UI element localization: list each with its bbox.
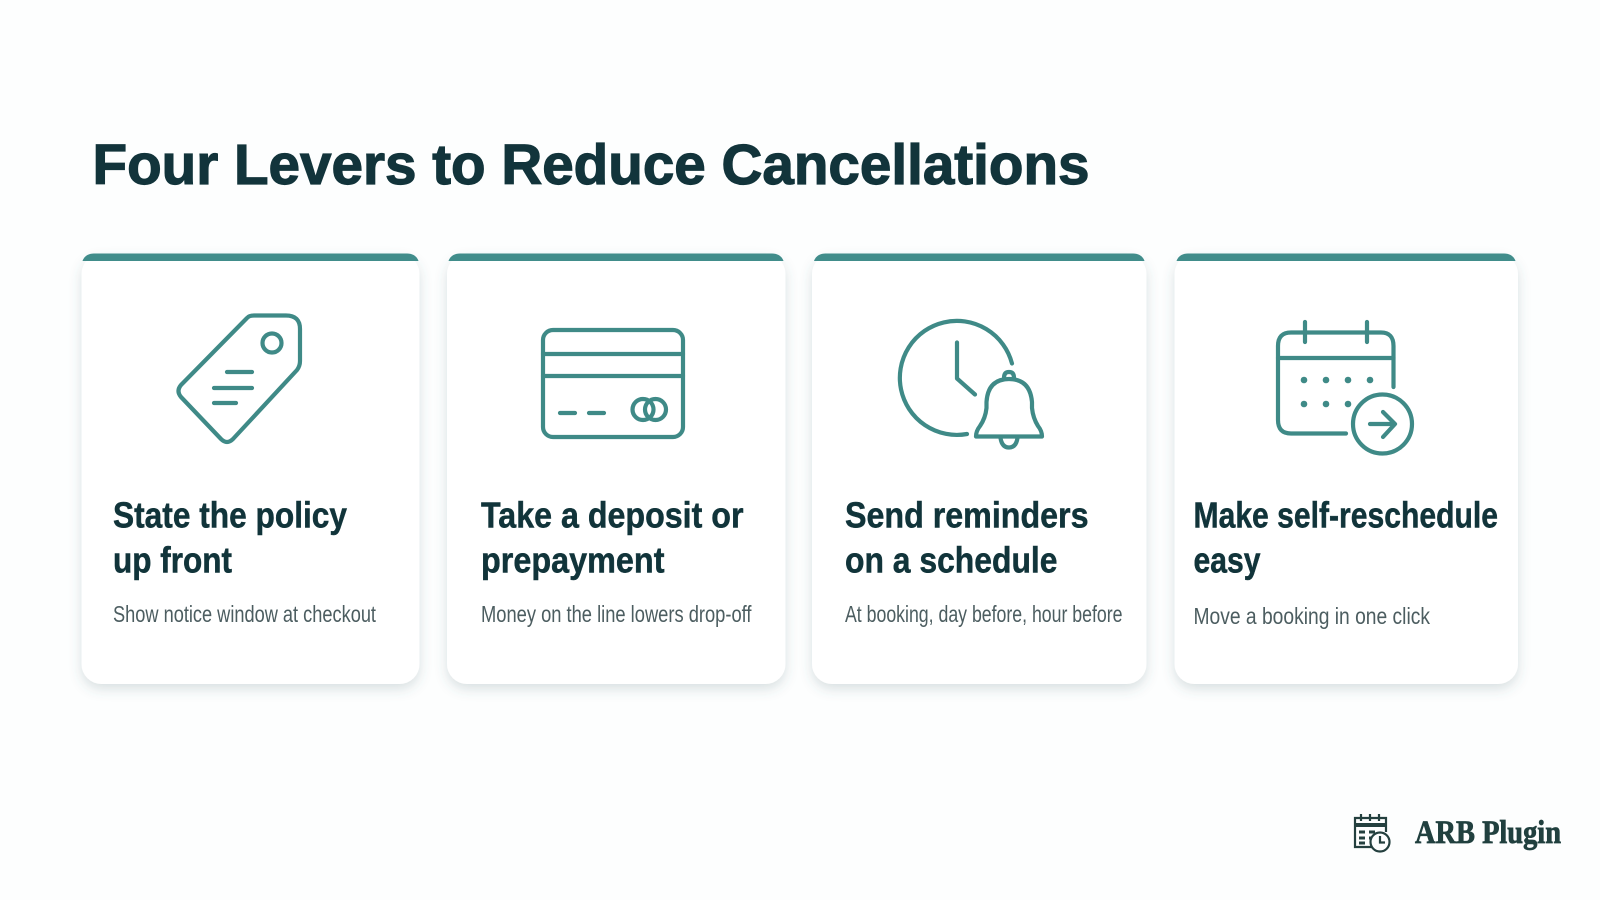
icon: logo calendar clock: [1355, 814, 1390, 852]
icon: calendar with arrow: [1278, 322, 1412, 454]
heading: Make self-reschedule: [1194, 494, 1498, 536]
panel: self-reschedule: [1174, 254, 1518, 684]
description: Move a booking in one click: [1194, 603, 1430, 629]
description: Show notice window at checkout: [113, 601, 376, 627]
icon dots: calendar days: [1301, 377, 1373, 407]
title: Four Levers to Reduce Cancellations: [92, 133, 1090, 197]
heading: prepayment: [481, 540, 664, 580]
logo: [1355, 814, 1561, 852]
panel: take a deposit: [447, 254, 786, 684]
panel: state the policy: [82, 254, 420, 684]
description: Money on the line lowers drop-off: [481, 601, 752, 627]
heading: State the policy: [113, 494, 347, 536]
description: At booking, day before, hour before: [845, 601, 1122, 627]
heading: on a schedule: [845, 540, 1058, 580]
heading: Take a deposit or: [481, 494, 744, 536]
heading: easy: [1194, 540, 1260, 580]
icon: price tag: [178, 316, 300, 442]
icon: clock and bell: [900, 321, 1042, 448]
wordmark: ARB Plugin: [1415, 815, 1561, 851]
heading: Send reminders: [845, 494, 1088, 536]
heading: up front: [113, 540, 232, 580]
icon: credit card: [543, 330, 683, 437]
panel: send reminders: [812, 254, 1146, 684]
